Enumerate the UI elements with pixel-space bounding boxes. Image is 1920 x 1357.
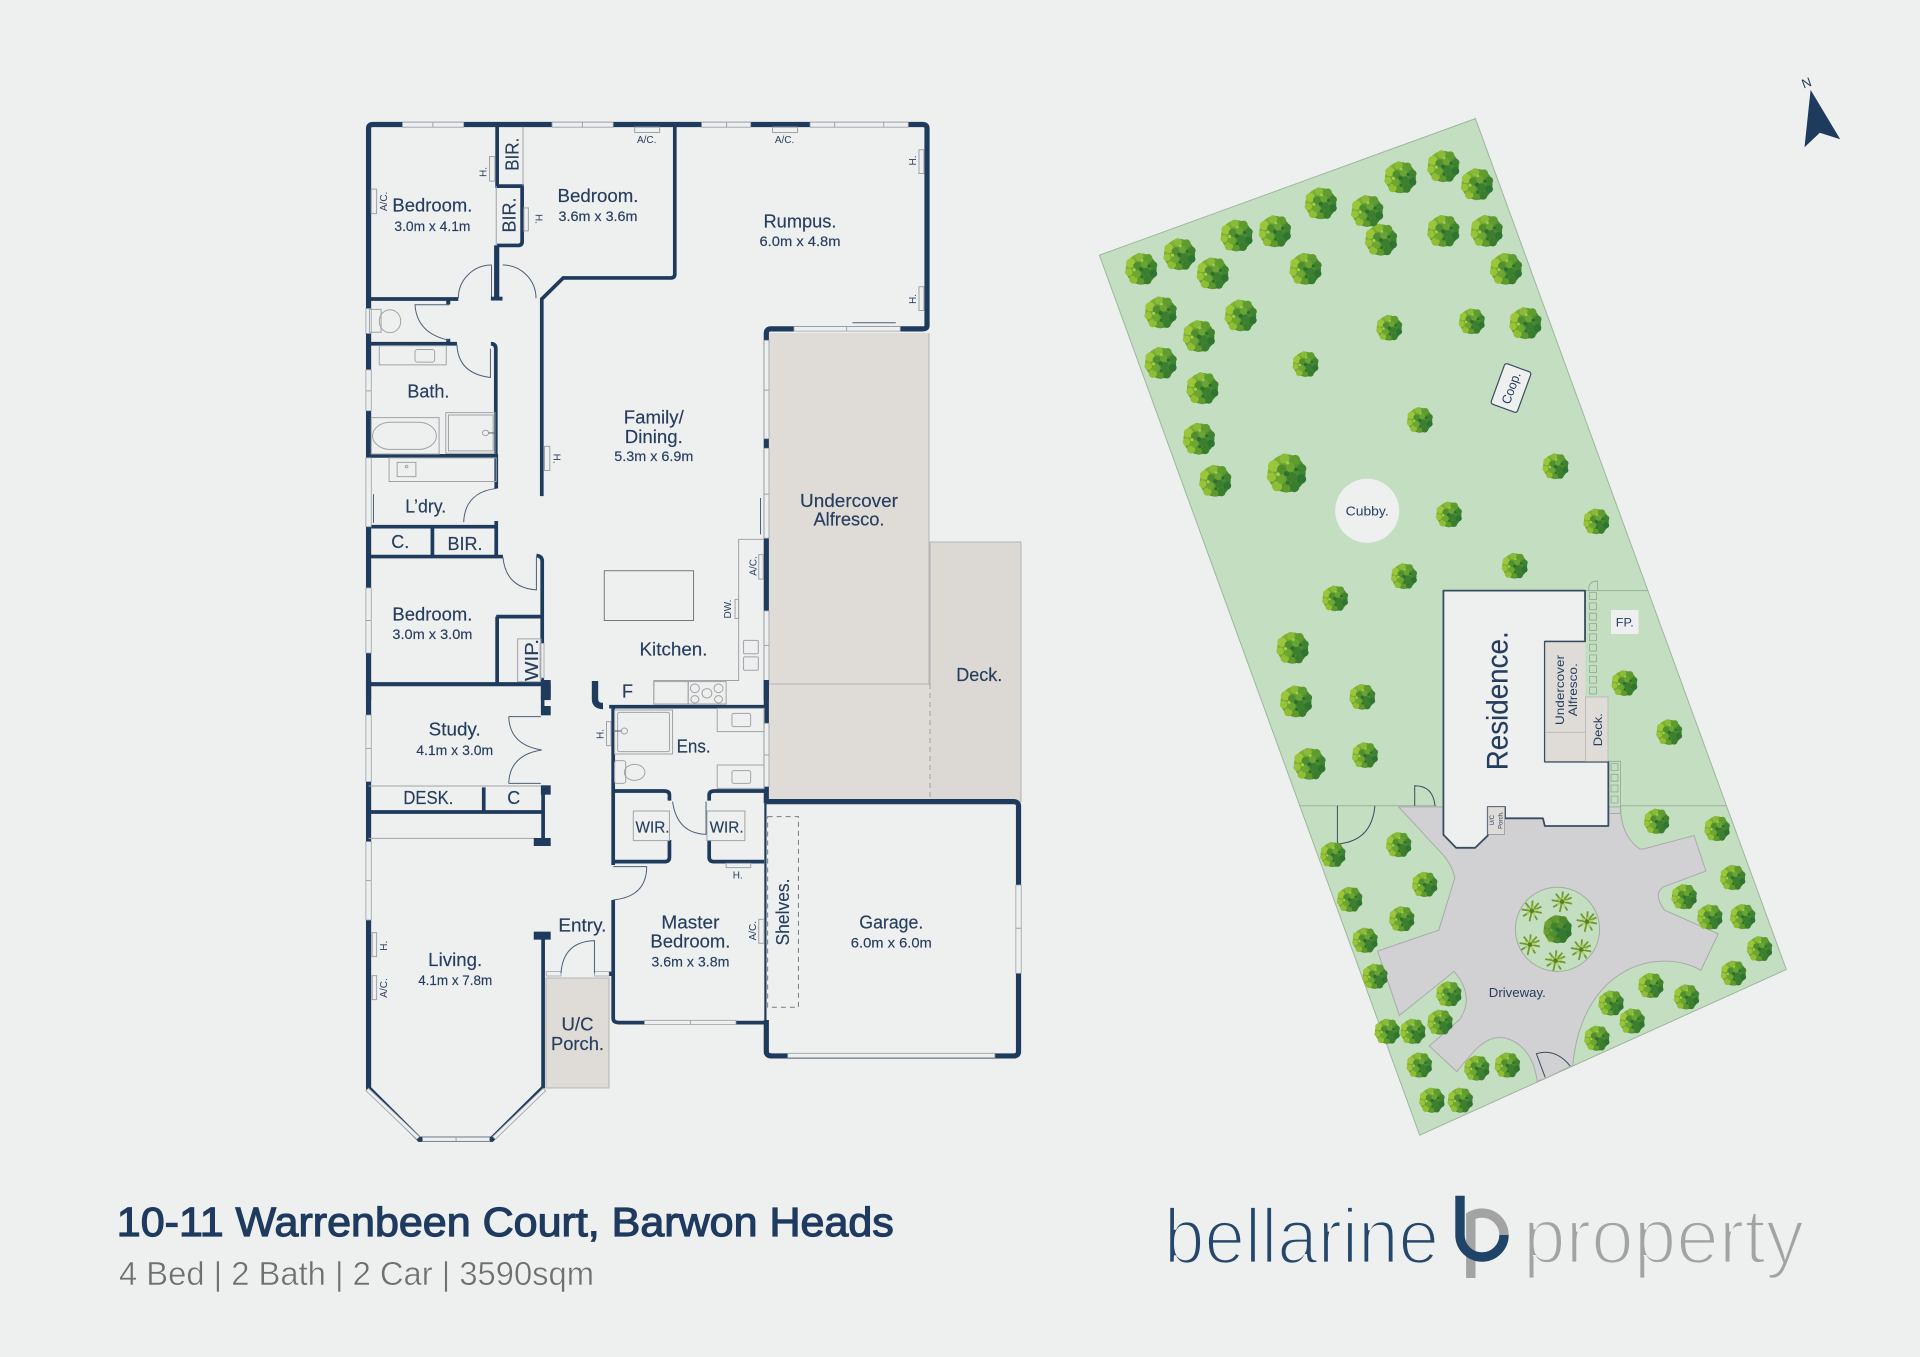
door swings lower: [509, 717, 798, 1007]
fire pit: [1611, 610, 1639, 634]
walls and fixtures lower level: [366, 680, 1021, 1141]
bedroom door swings: [458, 265, 536, 298]
label: C cupboard: C: [507, 788, 520, 808]
label: Laundry: L’dry.: [405, 496, 446, 516]
dimension: Bedroom 2: 3.6m x 3.6m: [558, 208, 638, 224]
appliance labels: H.: [379, 941, 390, 951]
garden island: [1515, 887, 1600, 971]
appliance labels: H.: [908, 156, 919, 166]
dimension: Master Bedroom: 3.6m x 3.8m: [651, 954, 729, 970]
door swings upper: [373, 305, 896, 590]
pavers: [1589, 581, 1621, 813]
dimension: Rumpus: 6.0m x 4.8m: [760, 233, 840, 249]
appliance labels: H.: [550, 454, 561, 464]
dimension: Bedroom 3: 3.0m x 3.0m: [392, 626, 472, 642]
label: WIR left: WIR.: [636, 819, 670, 836]
label: Driveway: Driveway.: [1489, 985, 1546, 1000]
label: U/C: U/C: [562, 1015, 594, 1035]
logo mark: [1460, 1196, 1504, 1278]
panel: floor plan: [366, 122, 1021, 1141]
subtitle: 4 Bed | 2 Bath | 2 Car | 3590sqm: [119, 1255, 594, 1292]
label: Living: Living.: [428, 950, 482, 970]
label: Residence: Residence.: [1482, 631, 1515, 770]
house outline: [1443, 591, 1608, 848]
walls and fixtures upper level: [366, 122, 927, 700]
label: Study: Study.: [429, 720, 481, 740]
bathroom fixtures: [369, 309, 496, 482]
label: Deck small: Deck.: [1591, 713, 1605, 746]
label: Alfresco small: Alfresco.: [1566, 663, 1580, 716]
label: Porch small: Porch.: [1498, 811, 1504, 829]
logo word: bellarine: bellarine: [1164, 1192, 1439, 1280]
label: BIR: BIR.: [448, 534, 482, 554]
fire pit: FP.: [1616, 616, 1634, 630]
label: Undercover: Undercover: [800, 491, 898, 511]
dimension: Bedroom 1: 3.0m x 4.1m: [394, 218, 470, 234]
alfresco and deck floors: [546, 333, 1021, 1088]
windows lower: [366, 715, 1021, 1141]
label: F: F: [622, 681, 633, 701]
appliance labels: DW.: [723, 600, 734, 618]
label: Kitchen: Kitchen.: [640, 640, 708, 660]
label: U/C small: U/C: [1490, 814, 1496, 825]
appliance labels: A/C.: [379, 192, 390, 211]
label: Porch: Porch.: [551, 1034, 604, 1054]
label: Bedroom 1: Bedroom.: [392, 196, 472, 216]
kitchen fixtures: [604, 539, 764, 700]
site layout: [1299, 581, 1772, 1113]
heater and AC units upper: [371, 127, 924, 470]
label: Garage: Garage.: [859, 912, 923, 932]
kitchen and ensuite fixtures: [372, 682, 764, 1000]
label: Ensuite: Ens.: [677, 736, 711, 756]
logo word: property: property: [1523, 1192, 1804, 1280]
label: Rumpus: Rumpus.: [764, 211, 836, 231]
appliance labels: H.: [478, 167, 489, 177]
dimension: Living: 4.1m x 7.8m: [418, 972, 492, 988]
label: Master Bedroom: Bedroom.: [650, 932, 730, 952]
dimension: Study: 4.1m x 3.0m: [416, 742, 493, 758]
cubby: Cubby.: [1346, 504, 1389, 518]
label: Entry: Entry.: [558, 916, 606, 936]
logo: [1164, 1192, 1804, 1280]
title: 10-11 Warrenbeen Court, Barwon Heads: [117, 1199, 894, 1245]
gates: [1337, 786, 1570, 1077]
label: Alfresco: Alfresco.: [814, 510, 884, 530]
dimension: Garage: 6.0m x 6.0m: [851, 935, 932, 951]
appliance labels: H.: [908, 294, 919, 304]
alfresco and deck: [1488, 642, 1608, 834]
icon: north arrow: N: [1799, 74, 1813, 91]
label: Undercover small: Undercover: [1553, 655, 1567, 725]
trees upper garden: [1125, 150, 1682, 780]
lot: [1099, 119, 1786, 1135]
icon: north arrow: [1799, 74, 1840, 147]
appliance labels: A/C.: [379, 978, 390, 998]
label: Desk: DESK.: [403, 788, 453, 808]
label: Dining: Dining.: [625, 427, 683, 447]
label: WIR right: WIR.: [710, 819, 744, 836]
coop: [1490, 363, 1532, 413]
coop: Coop.: [1498, 370, 1524, 406]
label: Bedroom 2: Bedroom.: [558, 186, 638, 206]
label: Family: Family/: [624, 407, 684, 427]
appliance labels: A/C.: [748, 556, 760, 576]
driveway: [1378, 807, 1718, 1081]
panel: site plan: [1099, 74, 1840, 1135]
appliance labels: A/C.: [748, 921, 759, 940]
cubby: [1335, 479, 1399, 543]
label: Bath: Bath.: [407, 382, 449, 402]
appliance labels: H.: [595, 729, 606, 739]
appliance labels: [379, 135, 919, 998]
room labels: [391, 138, 1002, 1054]
label: BIR lower: BIR.: [499, 198, 519, 232]
trees lower garden: [1320, 809, 1772, 1113]
kitchen stub wall: [595, 681, 603, 706]
label: Bedroom 3: Bedroom.: [392, 604, 472, 624]
appliance labels: H.: [532, 214, 544, 224]
dimension: Family Dining: 5.3m x 6.9m: [614, 448, 693, 464]
label: BIR upper: BIR.: [503, 138, 523, 171]
label: WIP: WIP.: [522, 639, 542, 681]
label: Master: Master: [661, 912, 719, 932]
appliance labels: A/C.: [637, 135, 656, 146]
windows upper: [366, 122, 908, 682]
label: Shelves: Shelves.: [773, 878, 793, 946]
appliance labels: H.: [733, 871, 743, 882]
label: Deck: Deck.: [956, 665, 1002, 685]
label: C: C.: [391, 532, 409, 552]
appliance labels: A/C.: [775, 135, 794, 146]
